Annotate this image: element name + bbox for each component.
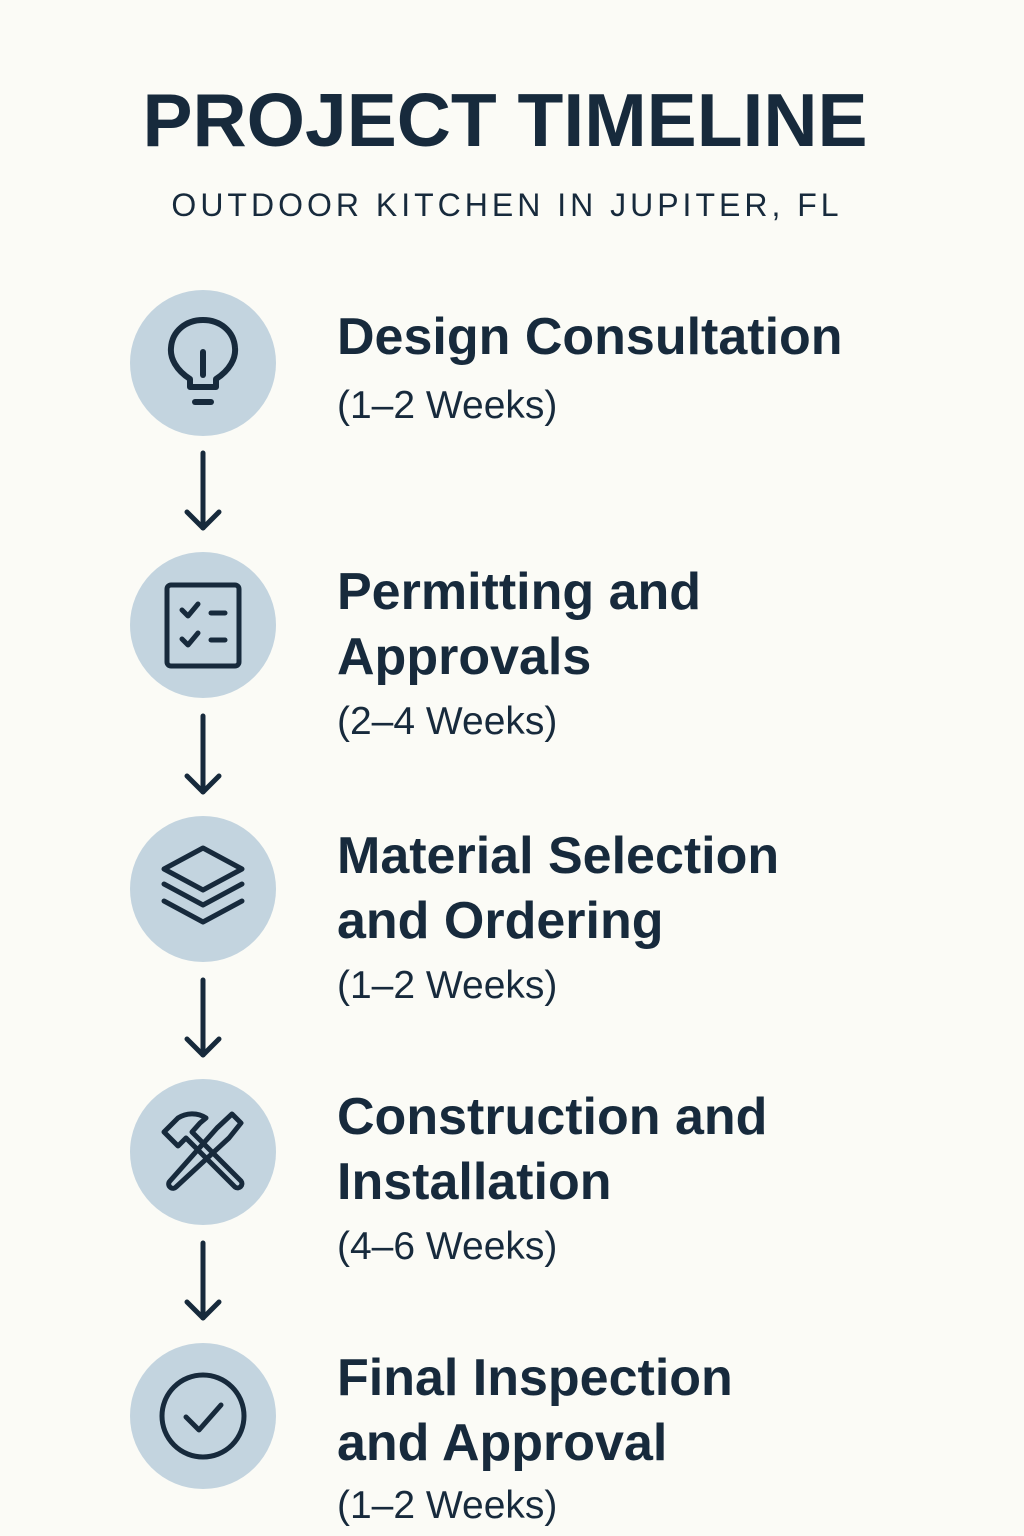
step 4 text xyxy=(337,1088,767,1268)
title: PROJECT TIMELINE xyxy=(142,78,868,162)
step 5 text: and Approval xyxy=(337,1414,667,1472)
step 2 text xyxy=(337,563,701,743)
step 2 text: Approvals xyxy=(337,628,591,686)
subtitle: OUTDOOR KITCHEN IN JUPITER, FL xyxy=(171,187,843,223)
step 4 text: Construction and xyxy=(337,1088,767,1146)
step 4 text: (4–6 Weeks) xyxy=(337,1225,557,1268)
icon: lightbulb xyxy=(130,290,276,436)
icon: checklist xyxy=(130,552,276,698)
arrow 1 xyxy=(187,453,219,528)
arrow 3 xyxy=(187,980,219,1055)
step 3 text: and Ordering xyxy=(337,892,663,950)
arrow 2 xyxy=(187,716,219,792)
step 4 text: Installation xyxy=(337,1153,611,1211)
step 5 text: Final Inspection xyxy=(337,1349,733,1407)
step 3 text: (1–2 Weeks) xyxy=(337,964,557,1007)
step 2 text: (2–4 Weeks) xyxy=(337,700,557,743)
step 3 text: Material Selection xyxy=(337,827,779,885)
step 1 text: (1–2 Weeks) xyxy=(337,384,557,427)
step 5 text: (1–2 Weeks) xyxy=(337,1484,557,1527)
step 3 text xyxy=(337,827,779,1007)
icon: layers xyxy=(130,816,276,962)
step 1 text: Design Consultation xyxy=(337,308,843,366)
step 1 text xyxy=(337,308,843,427)
icon: tools xyxy=(130,1079,276,1225)
step 2 text: Permitting and xyxy=(337,563,701,621)
step 5 text xyxy=(337,1349,733,1527)
arrow 4 xyxy=(187,1243,219,1318)
icon: check circle xyxy=(130,1343,276,1489)
